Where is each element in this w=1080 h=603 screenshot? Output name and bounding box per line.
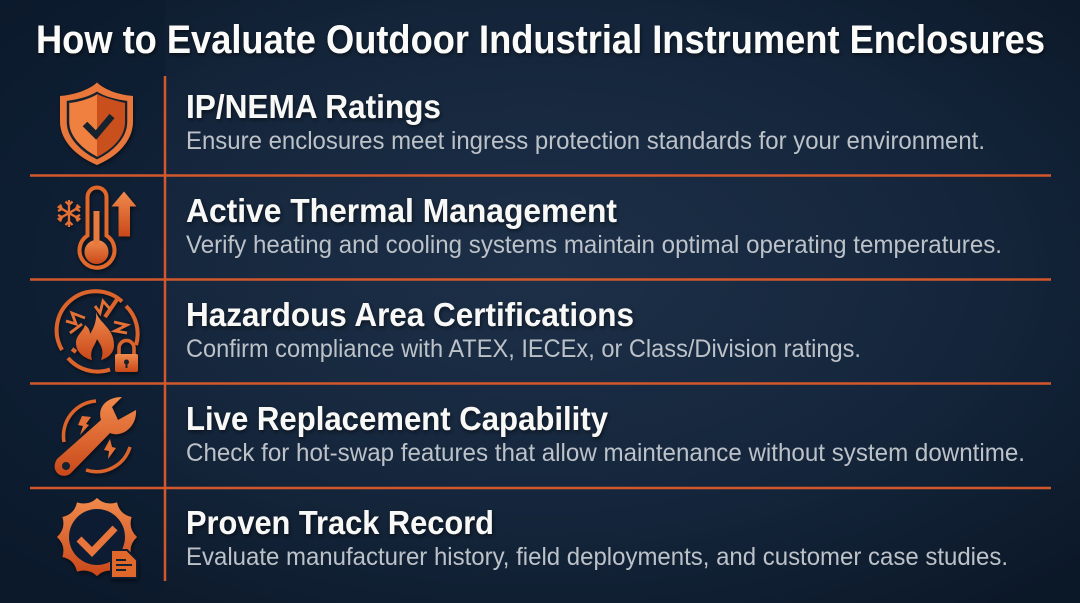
- panel: Proven Track Record: [57, 498, 1008, 578]
- icon: badge with check and document: [57, 498, 137, 578]
- panel: IP/NEMA Ratings: [60, 82, 985, 165]
- description: Ensure enclosures meet ingress protection standards for your environment.: [186, 127, 985, 155]
- description: Check for hot-swap features that allow maintenance without system downtime.: [186, 439, 1025, 467]
- icon: thermometer, snowflake and arrow: [58, 188, 137, 268]
- icon: flame in prohibition ring with padlock: [57, 291, 138, 372]
- heading: Proven Track Record: [186, 504, 494, 541]
- panel: Hazardous Area Certifications: [57, 291, 861, 372]
- description: Verify heating and cooling systems maintain optimal operating temperatures.: [186, 231, 1002, 259]
- heading: Live Replacement Capability: [186, 400, 609, 437]
- heading: IP/NEMA Ratings: [186, 88, 441, 125]
- icon: wrench with lightning bolts: [55, 397, 136, 476]
- panel: Live Replacement Capability: [55, 397, 1025, 476]
- description: Evaluate manufacturer history, field deployments, and customer case studies.: [186, 543, 1008, 571]
- panel: Active Thermal Management: [58, 188, 1002, 268]
- description: Confirm compliance with ATEX, IECEx, or Class/Division ratings.: [186, 335, 861, 363]
- heading: Hazardous Area Certifications: [186, 296, 634, 333]
- icon: shield with check: [60, 82, 133, 165]
- heading: Active Thermal Management: [186, 192, 617, 229]
